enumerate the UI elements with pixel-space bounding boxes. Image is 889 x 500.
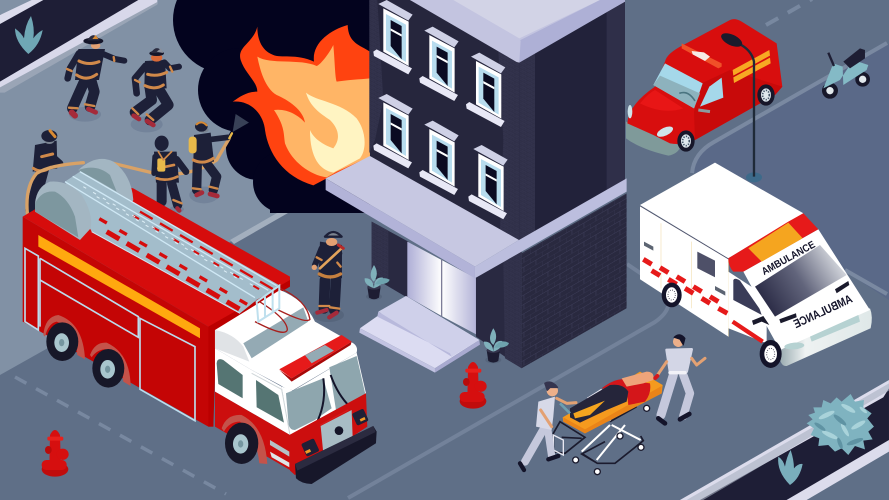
van side window <box>700 78 723 107</box>
cab door <box>728 272 767 343</box>
plant by wall <box>484 328 509 363</box>
middle flame <box>257 45 370 177</box>
cab side red <box>215 392 295 475</box>
stretcher frame dark <box>553 407 643 463</box>
cab windows <box>217 359 243 398</box>
road dashes left <box>15 377 226 494</box>
truck top deck <box>23 177 290 328</box>
cab hump <box>215 330 249 362</box>
firefighter running <box>131 48 179 132</box>
hood lower edge <box>777 308 872 366</box>
front windshields <box>286 378 332 430</box>
lot curb line <box>692 43 887 173</box>
patient <box>560 372 654 423</box>
inner flame <box>306 93 365 173</box>
left brick edge <box>369 0 383 153</box>
van windshield <box>653 63 703 108</box>
planter bottom-right <box>680 380 889 500</box>
upper wall brick edge <box>498 50 519 241</box>
ambulance <box>640 163 872 368</box>
side window <box>697 252 715 277</box>
van headlights <box>628 105 675 139</box>
windows <box>373 0 508 219</box>
plant top-left <box>15 16 43 54</box>
ambulance roof <box>640 163 803 258</box>
roof slab <box>410 0 625 62</box>
step plates <box>270 440 289 457</box>
hoses on cab <box>255 288 310 332</box>
van roof bar <box>682 43 722 68</box>
truck side upper <box>23 217 213 427</box>
bumper <box>295 426 377 484</box>
medic right <box>655 335 705 423</box>
right lot <box>694 44 889 300</box>
ambulance side <box>640 206 728 337</box>
planter top-left <box>0 0 157 93</box>
road dashes top <box>766 0 812 25</box>
upper left wall <box>369 0 537 241</box>
front wheel <box>225 423 258 464</box>
cab <box>215 288 377 484</box>
firefighters at truck and hose <box>27 114 249 213</box>
rear wheels <box>46 322 124 388</box>
mattress <box>563 372 663 433</box>
rear wheel arches <box>43 315 131 386</box>
grille <box>321 410 353 453</box>
ambulance and van group <box>626 19 872 368</box>
fire truck <box>23 159 377 484</box>
smoke cloud <box>173 0 376 213</box>
road edge strip right <box>845 270 887 294</box>
light bar <box>279 335 352 382</box>
street lamp <box>719 30 762 182</box>
storage box back <box>78 159 133 213</box>
firefighter with nozzle <box>189 122 232 203</box>
front lower body <box>289 393 367 475</box>
hood <box>743 229 870 350</box>
van lower bumper <box>626 122 681 156</box>
red van <box>626 19 782 156</box>
truck side dark end <box>208 280 290 427</box>
water spray <box>233 114 249 132</box>
ambulance wheels <box>662 283 782 368</box>
van hood highlight <box>640 90 683 111</box>
lower right brick wall <box>522 193 627 368</box>
curb strip: sidewalk <box>230 209 288 244</box>
ledge <box>326 156 519 267</box>
cab side white <box>215 348 290 435</box>
front wheel arch <box>222 415 267 464</box>
plant bottom-right <box>778 450 803 485</box>
firefighter at truck <box>32 130 60 210</box>
lower left wall <box>372 222 408 298</box>
door seam <box>440 260 444 317</box>
storage box front <box>35 181 91 240</box>
cab roof panel <box>243 307 308 358</box>
van side shade <box>694 70 782 140</box>
flames <box>233 25 370 185</box>
stretcher <box>553 372 663 475</box>
bush <box>807 394 874 455</box>
stretcher frame white <box>582 402 641 460</box>
right brick edge <box>519 53 535 241</box>
firefighter pointing <box>67 35 124 122</box>
firefighter back view <box>154 136 186 213</box>
door left leaf <box>407 242 442 316</box>
firefighter standing with axe <box>312 232 344 322</box>
headlights <box>301 408 369 457</box>
hydrant left <box>42 430 69 477</box>
wipers <box>313 375 353 430</box>
van vents <box>733 50 771 83</box>
sidewalk upper-left <box>0 0 380 375</box>
checker stripes <box>643 259 727 313</box>
windshield <box>755 245 847 317</box>
roof light band <box>728 213 818 272</box>
road edge strip <box>348 264 669 498</box>
plant by door <box>365 265 390 300</box>
side panels <box>25 248 195 421</box>
ambulance label: AMBULANCE <box>760 240 817 278</box>
door right leaf <box>442 260 476 334</box>
stretcher casters <box>573 405 650 475</box>
side handles <box>644 242 725 296</box>
outer flame <box>233 25 370 185</box>
ladder <box>65 172 280 313</box>
building <box>326 0 627 373</box>
ladder end frame <box>257 286 279 322</box>
van wheels <box>677 84 775 152</box>
front details <box>752 281 849 325</box>
cab roof <box>215 290 357 390</box>
van body <box>627 19 782 144</box>
cab front white <box>282 353 366 435</box>
medic left <box>520 382 576 470</box>
mirrored ambulance label: AMBULANCE <box>791 292 855 331</box>
yellow stripe <box>38 235 200 338</box>
entry steps <box>359 296 480 373</box>
upper right wall <box>519 2 625 241</box>
hydrant near steps <box>460 362 487 409</box>
side panel lines <box>661 223 728 337</box>
scooter <box>822 48 870 99</box>
fire hose <box>27 138 229 213</box>
wall right of door <box>476 252 522 368</box>
